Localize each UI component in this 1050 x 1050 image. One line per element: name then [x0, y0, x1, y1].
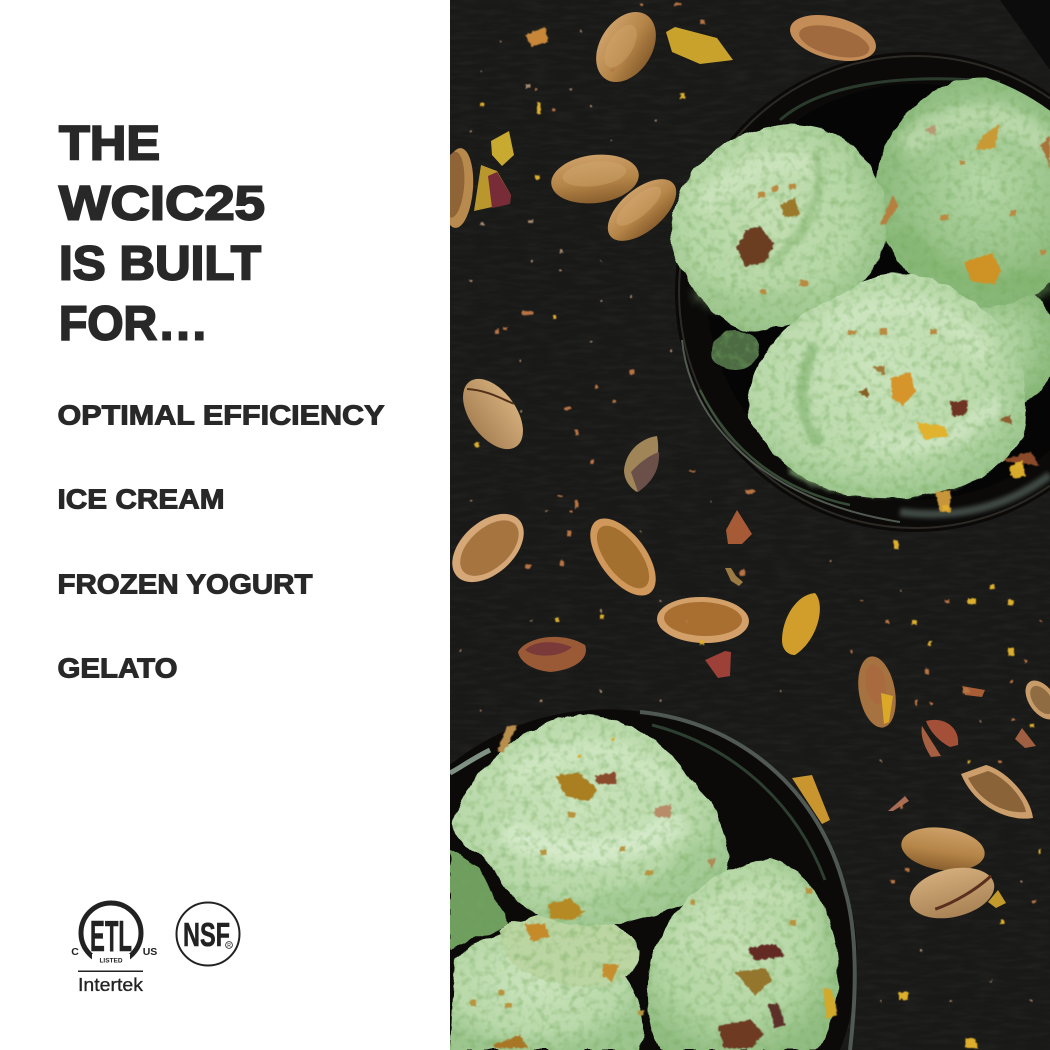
- title: THE: [59, 118, 160, 170]
- upper bowl: [675, 52, 1050, 532]
- title: [59, 118, 265, 350]
- scoop: upper left: [671, 124, 887, 332]
- icon: ETL Intertek listed mark: Intertek: [78, 975, 144, 995]
- feature list: [58, 400, 384, 684]
- feature list: GELATO: [58, 652, 178, 684]
- left white panel: [0, 0, 450, 1050]
- title: ...: [160, 298, 206, 350]
- lower bowl: [450, 710, 857, 1050]
- pistachio shells and nuts: [439, 1, 1050, 926]
- icon: NSF mark: NSF: [183, 916, 230, 953]
- scoop: lower right: [648, 858, 838, 1050]
- icon: ETL Intertek listed mark: ETL: [90, 912, 132, 961]
- scoop: lower top: [453, 715, 728, 926]
- panel: pistachio ice cream photo illustration: [450, 0, 1050, 1050]
- title: IS BUILT: [59, 238, 261, 290]
- lower bowl scoops: [450, 850, 643, 1050]
- scattered pistachio crumbs: [460, 3, 1042, 1048]
- scoop: upper front: [748, 274, 1027, 498]
- icon: ETL Intertek listed mark: [71, 903, 157, 995]
- icon: ETL Intertek listed mark: C: [71, 946, 79, 958]
- lower scoop nuts: [470, 725, 838, 1048]
- title: FOR: [59, 298, 157, 350]
- icon: NSF mark: [176, 902, 240, 966]
- feature list: OPTIMAL EFFICIENCY: [58, 400, 384, 430]
- upper scoop nuts: [737, 124, 1050, 512]
- feature list: ICE CREAM: [58, 484, 224, 514]
- icon: ETL Intertek listed mark: LISTED: [99, 958, 123, 964]
- icon: ETL Intertek listed mark: US: [143, 946, 157, 958]
- feature list: FROZEN YOGURT: [58, 568, 313, 600]
- icon: NSF mark: R: [227, 943, 231, 949]
- upper bowl scoops: [711, 78, 1050, 407]
- title: WCIC25: [59, 178, 265, 230]
